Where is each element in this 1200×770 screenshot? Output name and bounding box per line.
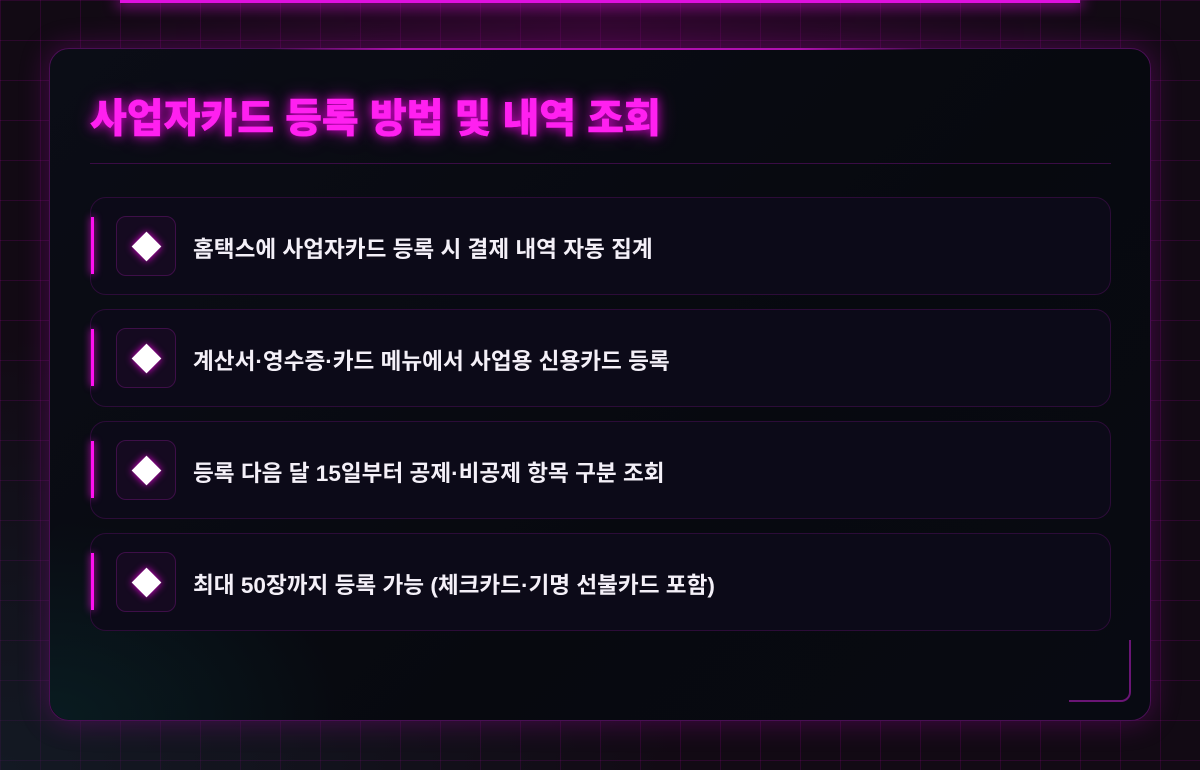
text 1: 홈택스에 사업자카드 등록 시 결제 내역 자동 집계 <box>193 237 653 262</box>
item 1 <box>90 197 1111 295</box>
icon: diamond <box>116 328 176 388</box>
icon: diamond <box>116 216 176 276</box>
text 3: 등록 다음 달 15일부터 공제·비공제 항목 구분 조회 <box>193 461 665 486</box>
icon: diamond <box>116 552 176 612</box>
corner bracket decoration <box>1069 640 1131 702</box>
item 2 <box>90 309 1111 407</box>
icon: diamond <box>116 440 176 500</box>
item 3 <box>90 421 1111 519</box>
item 4 <box>90 533 1111 631</box>
text 2: 계산서·영수증·카드 메뉴에서 사업용 신용카드 등록 <box>193 349 670 374</box>
title: 사업자카드 등록 방법 및 내역 조회 <box>90 97 661 141</box>
text 4: 최대 50장까지 등록 가능 (체크카드·기명 선불카드 포함) <box>193 573 715 598</box>
